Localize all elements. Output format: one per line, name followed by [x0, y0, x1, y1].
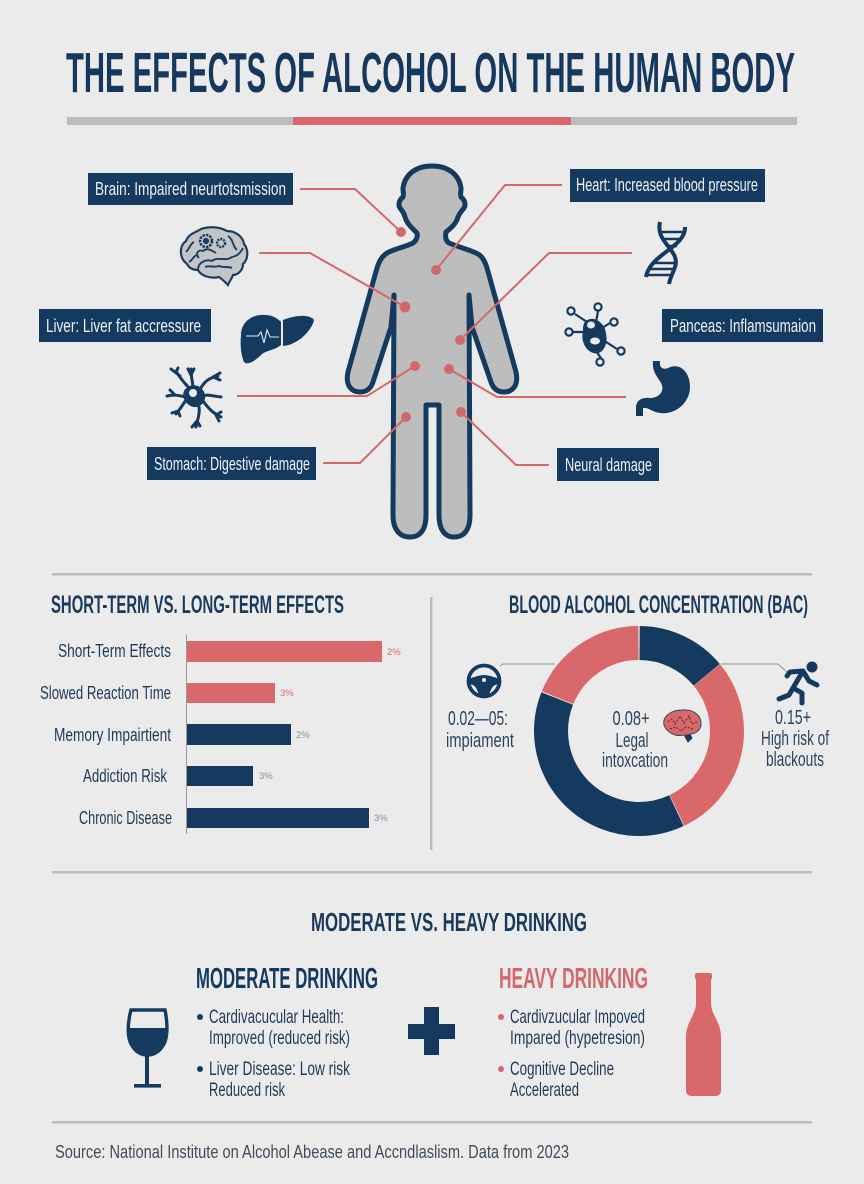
list: heavy drinking: Cardivzucular Impoved — [510, 1007, 645, 1028]
bar: memory impairment: Memory Impairtient — [54, 724, 171, 745]
heading: short vs long term: SHORT-TERM VS. LONG-TERM EFFECTS — [51, 591, 344, 619]
text: high bac — [761, 707, 829, 771]
label: brain: Brain: Impaired neurtotsmission — [95, 178, 286, 199]
icon: liver — [241, 315, 314, 363]
list: moderate drinking: Reduced risk — [209, 1080, 285, 1101]
divider — [52, 1121, 812, 1124]
bar: addiction risk — [83, 765, 273, 786]
icon: brain — [181, 227, 247, 285]
vertical divider — [430, 597, 432, 850]
heading: heavy drinking: HEAVY DRINKING — [499, 963, 648, 995]
text: legal limit: intoxcation — [602, 750, 668, 772]
label: liver: Liver: Liver fat accressure — [46, 315, 201, 336]
text: legal limit: Legal — [616, 730, 648, 752]
source footnote: Source: National Institute on Alcohol Abease and Accndlaslism. Data from 2023 — [55, 1142, 569, 1162]
icon: bottle — [686, 973, 721, 1096]
label: stomach: Stomach: Digestive damage — [154, 453, 310, 474]
label: neural: Neural damage — [565, 454, 652, 475]
heading: moderate drinking: MODERATE DRINKING — [196, 963, 378, 995]
icon: neuron — [167, 368, 221, 427]
bar: memory impairment — [54, 724, 310, 745]
list: heavy drinking: Accelerated — [510, 1080, 579, 1101]
label: liver — [39, 309, 211, 342]
list: moderate drinking: Liver Disease: Low risk — [209, 1059, 350, 1080]
bar: short-term effects: Short-Term Effects — [58, 640, 171, 661]
label: heart: Heart: Increased blood pressure — [576, 174, 758, 195]
list: moderate drinking: Improved (reduced risk) — [209, 1028, 350, 1049]
bar: chronic disease: 3% — [374, 813, 388, 824]
text: low bac — [446, 708, 514, 752]
divider — [52, 573, 812, 576]
bar: short-term effects: 2% — [387, 647, 401, 658]
bar: addiction risk: Addiction Risk — [83, 765, 168, 786]
icon: pancreas cell — [565, 303, 625, 366]
bar: chronic disease: Chronic Disease — [79, 807, 172, 828]
bar: addiction risk: 3% — [259, 771, 273, 782]
human body figure — [347, 166, 517, 537]
list: heavy drinking: Cognitive Decline — [510, 1059, 614, 1080]
bar: slowed reaction time: 3% — [280, 688, 294, 699]
label: pancreas — [662, 309, 823, 342]
label: heart — [570, 169, 765, 202]
label: stomach — [147, 447, 316, 480]
callout lines and markers — [237, 185, 632, 465]
text: low bac: impiament — [446, 730, 514, 752]
text: high bac: 0.15+ — [775, 707, 811, 729]
text: legal limit — [602, 708, 668, 772]
icon: running person — [779, 662, 818, 703]
list: heavy drinking — [498, 1007, 645, 1101]
icon: brain small — [664, 710, 701, 742]
donut chart — [551, 643, 727, 819]
heading: moderate vs heavy: MODERATE VS. HEAVY DRINKING — [311, 907, 587, 937]
bar: slowed reaction time: Slowed Reaction Time — [40, 682, 171, 703]
list: moderate drinking — [197, 1007, 350, 1101]
icon: steering wheel — [468, 666, 500, 696]
bar chart — [40, 635, 401, 834]
text: low bac: 0.02—05: — [448, 708, 508, 730]
bar: short-term effects — [58, 640, 401, 662]
text: high bac: blackouts — [766, 749, 824, 771]
title underline — [67, 117, 797, 125]
icon: dna — [646, 222, 685, 284]
bar: chronic disease — [79, 807, 388, 828]
icon: wine glass — [128, 1010, 167, 1088]
list: moderate drinking: Cardivacucular Health: — [209, 1007, 344, 1028]
icon: stomach — [636, 361, 690, 416]
list: heavy drinking: Impared (hypetresion) — [510, 1028, 645, 1049]
label: brain — [88, 173, 293, 205]
bar: memory impairment: 2% — [296, 730, 310, 741]
icon: plus — [408, 1007, 455, 1055]
text: legal limit: 0.08+ — [612, 708, 650, 730]
label: neural — [557, 448, 659, 481]
connector lines — [500, 664, 787, 672]
text: high bac: High risk of — [761, 728, 829, 750]
divider — [52, 871, 812, 874]
